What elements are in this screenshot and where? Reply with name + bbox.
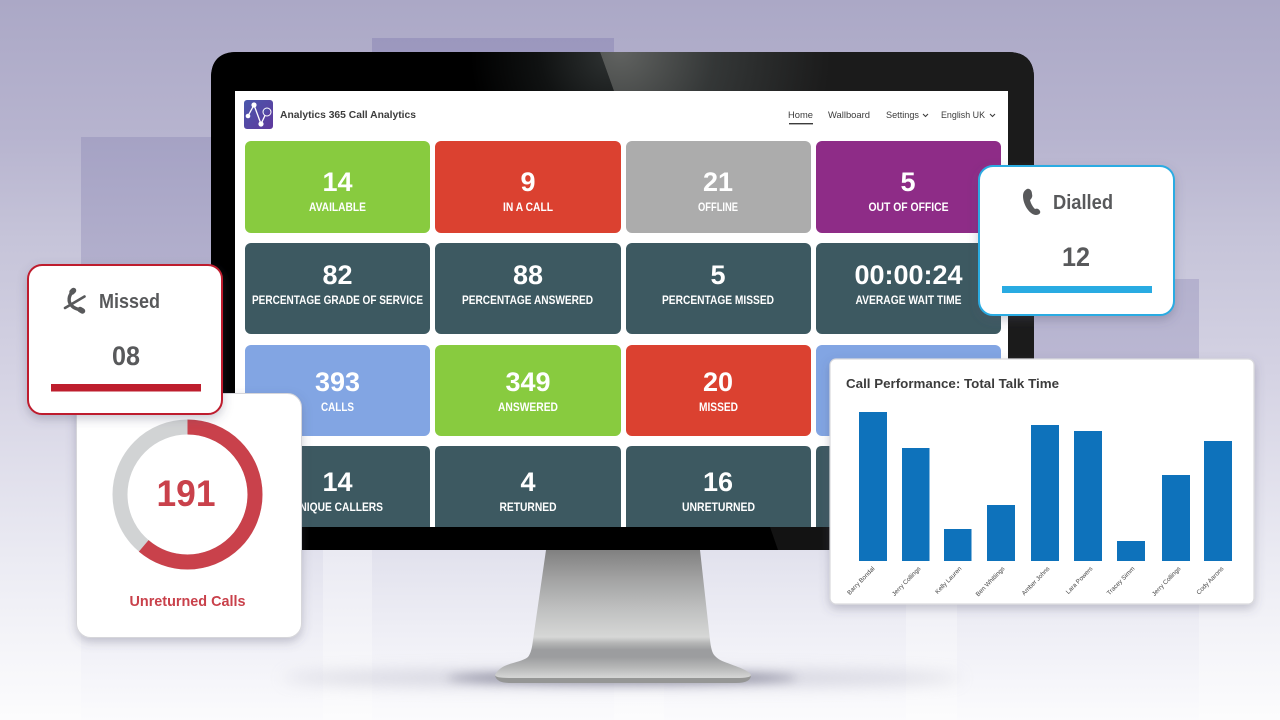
- tile: average wait time: 00:00:24: [854, 260, 963, 290]
- tile: returned: RETURNED: [500, 500, 557, 514]
- tile: missed: 20: [703, 367, 733, 397]
- tile: answered: ANSWERED: [498, 400, 558, 414]
- donut value: 191: [156, 473, 216, 514]
- dialled value: 12: [1062, 242, 1090, 272]
- tile: unique callers: UNIQUE CALLERS: [292, 500, 383, 514]
- tile: offline: [626, 141, 811, 233]
- bar chart: [859, 412, 1232, 561]
- icon: phone handset: [1023, 189, 1040, 215]
- tile: dark partly hidden: [816, 446, 1001, 527]
- chart axis labels: Jerry Collings: [891, 566, 922, 598]
- tile: percentage answered: [435, 243, 621, 334]
- card: dialled: [979, 166, 1174, 315]
- tile: out of office: 5: [900, 167, 916, 197]
- tile: answered: [435, 345, 621, 436]
- chart axis labels: Tracey Simm: [1106, 566, 1136, 597]
- card: missed: [28, 265, 222, 414]
- app title: Analytics 365 Call Analytics: [280, 110, 416, 121]
- tile: calls: [245, 345, 430, 436]
- tile: unique callers: 14: [322, 467, 353, 497]
- tile: blue partly hidden: [816, 345, 1001, 436]
- monitor bezel: [211, 52, 1034, 550]
- tile: calls: 393: [315, 367, 360, 397]
- tile: percentage answered: PERCENTAGE ANSWERED: [462, 293, 593, 307]
- icon: missed call handset: [65, 290, 84, 311]
- tile: out of office: [816, 141, 1001, 233]
- navigation menu: Home: [788, 110, 813, 121]
- missed value: 08: [112, 341, 140, 371]
- tile: returned: 4: [520, 467, 536, 497]
- chart axis labels: [846, 565, 1225, 598]
- tile: in a call: IN A CALL: [503, 200, 553, 214]
- chart axis labels: Ben Whitlings: [975, 566, 1006, 598]
- dashboard screen: [235, 91, 1008, 527]
- tile: unique callers: [245, 446, 430, 527]
- tile: missed: MISSED: [699, 400, 738, 414]
- tile: available: 14: [322, 167, 353, 197]
- chart axis labels: Cody Aarons: [1195, 566, 1225, 596]
- tile: average wait time: AVERAGE WAIT TIME: [856, 293, 962, 307]
- chart axis labels: Lara Powers: [1065, 566, 1094, 596]
- navigation menu: Wallboard: [828, 110, 870, 121]
- card: call performance chart: [830, 359, 1254, 604]
- tile: percentage missed: [626, 243, 811, 334]
- tile: percentage missed: PERCENTAGE MISSED: [662, 293, 774, 307]
- dialled label: Dialled: [1053, 192, 1113, 214]
- tile: offline: OFFLINE: [698, 200, 738, 214]
- tile: available: [245, 141, 430, 233]
- tile: percentage grade of service: PERCENTAGE GRADE OF SERVICE: [252, 293, 423, 307]
- tile: unreturned: UNRETURNED: [682, 500, 755, 514]
- card: unreturned calls: [76, 394, 302, 638]
- chart axis labels: Amber Johns: [1021, 566, 1051, 597]
- tile: average wait time: [816, 243, 1001, 334]
- chart axis labels: Kelly Lauren: [934, 565, 964, 596]
- tile: in a call: [435, 141, 621, 233]
- app logo: [244, 100, 273, 129]
- tile: percentage grade of service: [245, 243, 430, 334]
- tile: returned: [435, 446, 621, 527]
- navigation menu: Settings: [886, 110, 919, 121]
- monitor stand: [495, 550, 751, 683]
- donut label: Unreturned Calls: [130, 593, 246, 610]
- missed label: Missed: [99, 291, 160, 313]
- tile: offline: 21: [703, 167, 733, 197]
- tile: unreturned: 16: [703, 467, 733, 497]
- tile: percentage grade of service: 82: [322, 260, 353, 290]
- tile: percentage missed: 5: [710, 260, 726, 290]
- tile: missed: [626, 345, 811, 436]
- tile: in a call: 9: [520, 167, 536, 197]
- monitor stand shadow: [282, 670, 962, 686]
- tile: available: AVAILABLE: [309, 200, 366, 214]
- tile: out of office: OUT OF OFFICE: [868, 200, 948, 214]
- chart axis labels: Jerry Collings: [1151, 566, 1182, 598]
- missed bar: [51, 384, 201, 392]
- tile: unreturned: [626, 446, 811, 527]
- tile: calls: CALLS: [321, 400, 354, 414]
- dialled bar: [1002, 286, 1152, 293]
- chart title: Call Performance: Total Talk Time: [846, 376, 1059, 391]
- chart axis labels: Barry Bondal: [846, 566, 876, 597]
- navigation menu: [788, 110, 995, 124]
- tile: percentage answered: 88: [513, 260, 543, 290]
- donut chart: [120, 427, 255, 562]
- navigation menu: English UK: [941, 110, 986, 121]
- tile: answered: 349: [505, 367, 551, 397]
